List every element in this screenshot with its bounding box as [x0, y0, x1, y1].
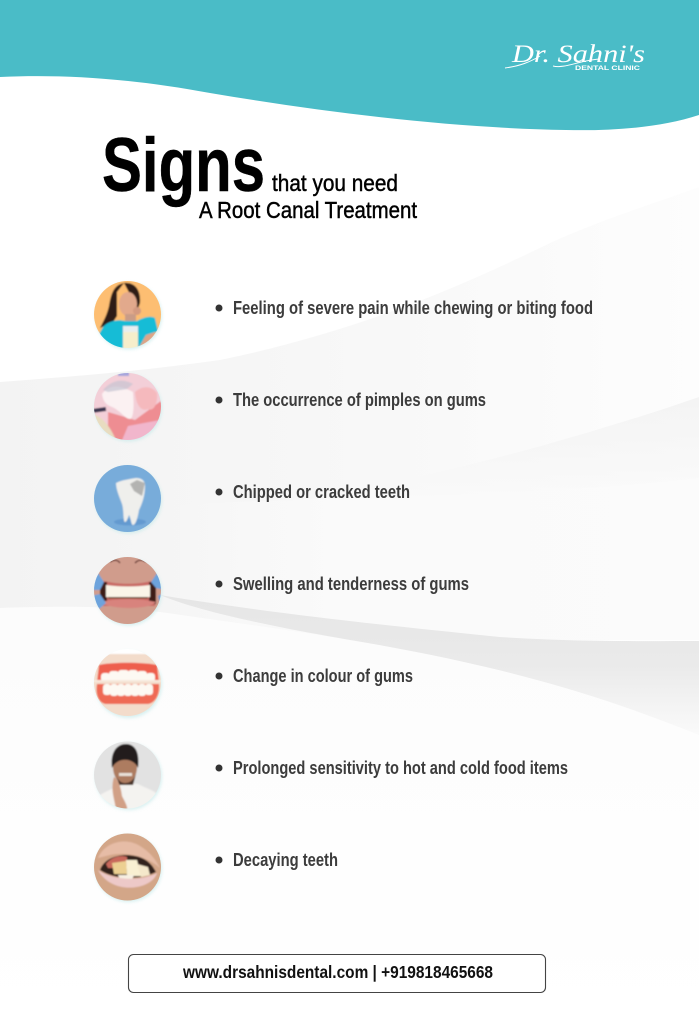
title: that you need — [272, 170, 398, 196]
clinic logo — [505, 41, 645, 72]
title — [102, 123, 418, 223]
title: A Root Canal Treatment — [199, 197, 418, 223]
icon: decaying teeth mouth — [94, 834, 164, 904]
text: sign 2: The occurrence of pimples on gums — [233, 390, 486, 410]
text: sign 7: Decaying teeth — [233, 850, 338, 870]
text: sign 3: Chipped or cracked teeth — [233, 482, 410, 502]
icon: woman with toothache — [94, 281, 164, 351]
contact box — [128, 954, 546, 992]
text: sign 4: Swelling and tenderness of gums — [233, 574, 469, 594]
text: sign 1: Feeling of severe pain while chewing or biting food — [233, 298, 593, 318]
icon: cracked tooth — [94, 465, 163, 534]
icon: swollen gums with gloved hands — [94, 557, 163, 626]
clinic logo: Dr. Sahni's — [511, 41, 645, 68]
text: sign 6: Prolonged sensitivity to hot and cold food items — [233, 758, 568, 778]
icon: tooth and gums illustration — [94, 373, 163, 442]
contact box: www.drsahnisdental.com | +919818465668 — [182, 962, 493, 982]
icon: denture model — [94, 654, 164, 719]
title: Signs — [102, 123, 265, 208]
teal header wave — [0, 0, 699, 130]
clinic logo: DENTAL CLINIC — [575, 65, 640, 72]
icon: man with tooth sensitivity — [94, 742, 164, 812]
text: sign 5: Change in colour of gums — [233, 666, 413, 686]
